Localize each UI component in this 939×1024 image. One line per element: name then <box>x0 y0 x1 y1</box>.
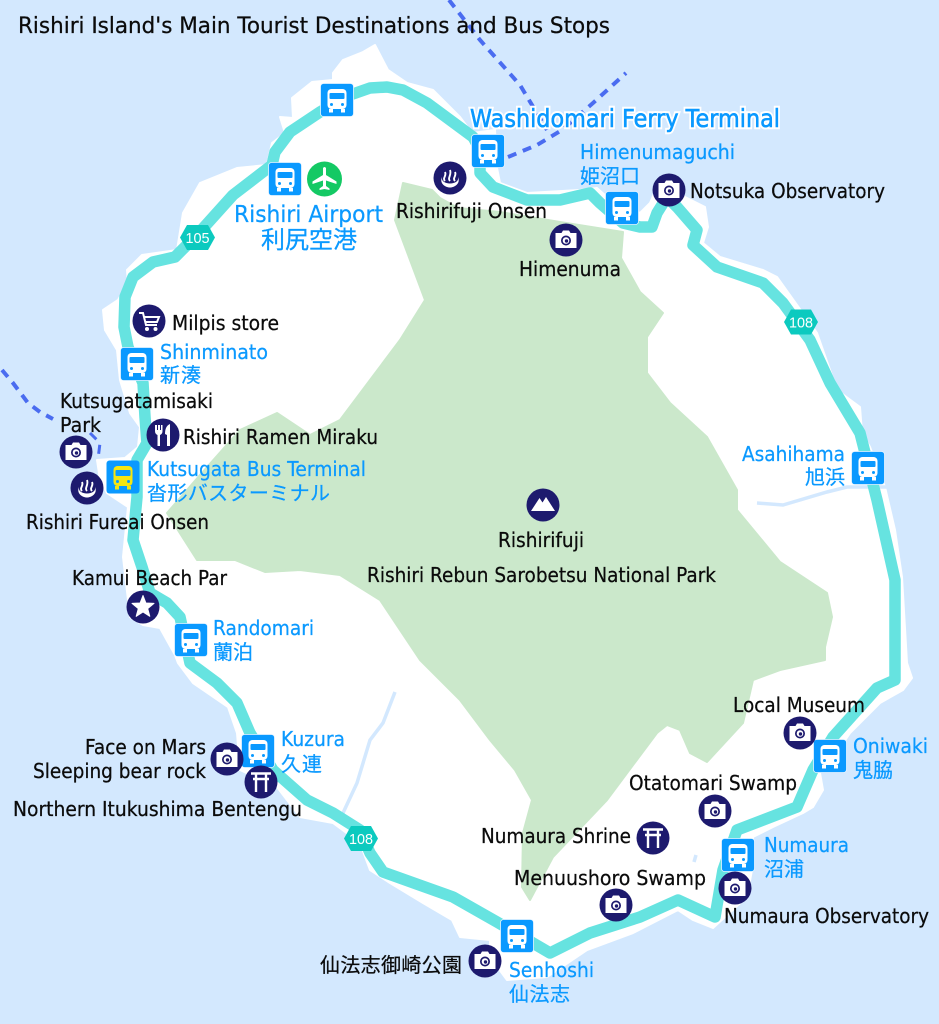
title: Rishiri Island's Main Tourist Destinations and Bus Stops <box>18 14 610 39</box>
label: Local Museum: Local Museum <box>733 693 865 717</box>
label: Northern Itukushima Bentengu: Northern Itukushima Bentengu <box>13 797 302 821</box>
label: Shinminato: Shinminato <box>160 340 268 364</box>
label: Notsuka Observatory: Notsuka Observatory <box>690 179 885 203</box>
icon: camera Himenuma <box>550 224 582 256</box>
label: Himenumaguchi: Himenumaguchi <box>580 140 735 164</box>
label: Rishiri Airport Japanese: 利尻空港 <box>261 227 357 254</box>
label: Shinminato Japanese: 新湊 <box>160 364 201 387</box>
icon: bus stop Randomari <box>174 624 208 656</box>
label: Milpis store: Milpis store <box>172 311 279 335</box>
icon: yellow bus terminal Kutsugata <box>106 460 140 494</box>
label: Senhoshi Japanese: 仙法志 <box>509 983 570 1006</box>
route badge 108 east <box>784 310 818 334</box>
label: Rishirifuji: Rishirifuji <box>498 528 584 552</box>
label: Himenuma: Himenuma <box>519 257 621 281</box>
icon: camera Otatomari Swamp <box>698 794 732 828</box>
label: Oniwaki: Oniwaki <box>853 734 928 758</box>
national park area <box>167 183 832 900</box>
route badge 108 south <box>344 826 378 851</box>
icon: bus stop north <box>320 84 354 116</box>
icon: restaurant <box>146 418 180 452</box>
icon: bus stop Asahihama <box>852 452 884 484</box>
icon: camera Face on Mars <box>210 742 244 776</box>
island landmass <box>97 45 912 980</box>
label: Menuushoro Swamp: Menuushoro Swamp <box>514 866 706 890</box>
label: Numaura Shrine: Numaura Shrine <box>481 824 631 848</box>
label: Himenumaguchi Japanese: 姫沼口 <box>580 165 640 188</box>
label: Rishiri Ramen Miraku: Rishiri Ramen Miraku <box>183 425 378 449</box>
icon: camera Notsuka <box>652 174 686 206</box>
rivers <box>343 487 887 862</box>
label: Senhoshi: Senhoshi <box>509 958 594 982</box>
label: Rishiri Airport: Rishiri Airport <box>234 202 383 228</box>
label: Sleeping bear rock: Sleeping bear rock <box>33 759 206 783</box>
label: Kutsugatamisaki: Kutsugatamisaki <box>60 389 213 413</box>
label: Senhoshi Cape Park: 仙法志御崎公園 <box>320 954 462 977</box>
label: Oniwaki Japanese: 鬼脇 <box>853 759 893 782</box>
route badge 105 <box>180 225 215 250</box>
icon: airplane <box>307 162 342 196</box>
icon: star Kamui Beach <box>126 590 160 624</box>
icon: bus stop Oniwaki <box>814 740 846 772</box>
icon: torii Itukushima <box>244 766 278 798</box>
icon: onsen Rishirifuji <box>434 162 466 194</box>
label: Kutsugata Bus Terminal Japanese: 沓形バスターミナル <box>147 482 330 505</box>
icon: camera Kutsugatamisaki Park <box>60 436 92 468</box>
label: Rishirifuji Onsen: Rishirifuji Onsen <box>396 199 547 223</box>
icon: bus stop Senhoshi <box>500 920 534 952</box>
icon: bus stop Shinminato <box>120 348 154 380</box>
label: Face on Mars: Face on Mars <box>85 735 206 759</box>
icon: camera Numaura Observatory <box>718 872 752 904</box>
label: Randomari Japanese: 蘭泊 <box>213 641 253 664</box>
label: Rishiri Fureai Onsen: Rishiri Fureai Onsen <box>26 510 209 534</box>
label: Rishiri Rebun Sarobetsu National Park: Rishiri Rebun Sarobetsu National Park <box>367 563 716 587</box>
label: Numaura Japanese: 沼浦 <box>764 858 804 881</box>
label: Kutsugata Bus Terminal: Kutsugata Bus Terminal <box>147 457 366 481</box>
route badge 108 south: 108 <box>349 831 373 848</box>
icon: torii Numaura Shrine <box>636 822 670 854</box>
heading emphasis: Washidomari Ferry Terminal: Washidomari Ferry Terminal <box>470 104 780 133</box>
icon: bus stop Numaura <box>722 838 754 872</box>
label: Kuzura: Kuzura <box>281 727 345 751</box>
ferry routes <box>2 0 626 459</box>
icon: camera Senhoshi Cape <box>468 944 502 978</box>
icon: camera Local Museum <box>784 716 816 750</box>
icon: bus stop Himenumaguchi <box>606 192 638 224</box>
icon: camera Menuushoro Swamp <box>600 888 632 922</box>
label: Asahihama Japanese: 旭浜 <box>805 466 845 489</box>
icon: mountain Rishirifuji <box>526 488 560 522</box>
label: Park: Park <box>60 413 101 437</box>
label: Kamui Beach Par: Kamui Beach Par <box>72 566 228 590</box>
icon: shopping cart <box>132 304 166 338</box>
route badge 105: 105 <box>186 230 210 247</box>
icon: bus stop Washidomari <box>472 134 504 168</box>
label: Numaura: Numaura <box>764 833 849 857</box>
icon: onsen Fureai <box>70 472 104 504</box>
label: Otatomari Swamp: Otatomari Swamp <box>629 771 797 795</box>
route badge 108 east: 108 <box>789 314 813 332</box>
coastal road <box>124 87 895 953</box>
icon: bus stop airport <box>268 162 302 196</box>
label: Asahihama: Asahihama <box>742 442 845 466</box>
heading: Washidomari Ferry Terminal: Washidomari Ferry Terminal <box>470 104 780 133</box>
label: Kuzura Japanese: 久連 <box>281 753 322 776</box>
icon: bus stop Kuzura <box>242 734 274 768</box>
label: Randomari: Randomari <box>213 616 314 640</box>
